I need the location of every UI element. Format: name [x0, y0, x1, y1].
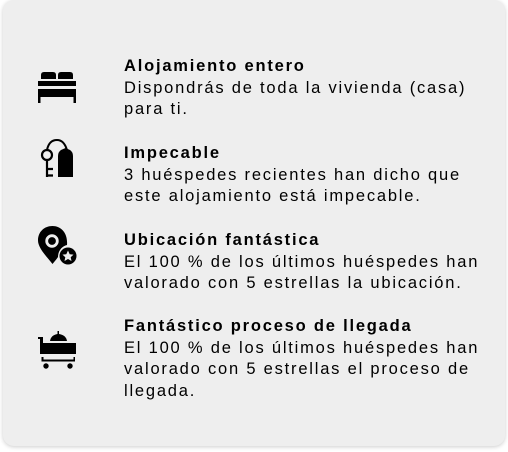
text block: Ubicación fantástica: Ubicación fantástica — [124, 231, 320, 249]
text block: Fantástico proceso de llegada: El 100 % de los últimos huéspedes han — [124, 339, 479, 357]
text block: Impecable: 3 huéspedes recientes han dicho que — [124, 166, 461, 184]
text block: Ubicación fantástica: El 100 % de los últimos huéspedes han — [124, 253, 479, 271]
text block: Fantástico proceso de llegada: Fantástico proceso de llegada — [124, 317, 412, 335]
text block: Ubicación fantástica — [124, 231, 479, 292]
text block: Impecable: Impecable — [124, 144, 221, 162]
text block: Impecable — [124, 144, 461, 205]
text block: Ubicación fantástica: valorado con 5 estrellas la ubicación. — [124, 274, 463, 292]
text block: Impecable: este alojamiento está impecable. — [124, 187, 422, 205]
text block: Fantástico proceso de llegada: llegada. — [124, 382, 196, 400]
text block: Alojamiento entero — [124, 57, 466, 118]
text block: Alojamiento entero: Alojamiento entero — [124, 57, 306, 75]
text block: Fantástico proceso de llegada: valorado con 5 estrellas el proceso de — [124, 360, 470, 378]
text block: Fantástico proceso de llegada — [124, 317, 479, 400]
text block: Alojamiento entero: para ti. — [124, 100, 189, 118]
text block: Alojamiento entero: Dispondrás de toda la vivienda (casa) — [124, 79, 466, 97]
